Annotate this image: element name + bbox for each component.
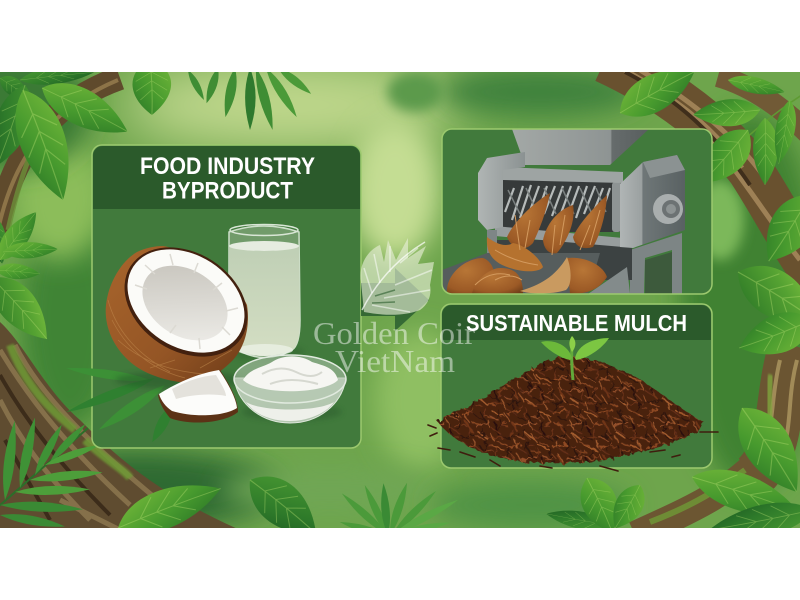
- foliage: top right leaves: [620, 72, 800, 185]
- icon: palm blades under coconut: [65, 364, 177, 445]
- arrow: process flow: [361, 268, 429, 331]
- foliage: bottom left palm: [0, 416, 103, 531]
- icon: curled coir husks: [487, 237, 543, 271]
- icon: coir tray: [442, 253, 600, 294]
- heading: food industry byproduct: BYPRODUCT: [162, 178, 293, 204]
- icon: mulch pile: [428, 357, 718, 471]
- foliage: left middle leaves: [0, 212, 58, 339]
- icon: machine crossbars: [503, 167, 623, 183]
- icon: right housing with shaft: [620, 155, 685, 248]
- watermark text: Golden Coir: [313, 315, 475, 351]
- icon: halved coconut: [104, 225, 268, 389]
- panel: shredder machine: [442, 129, 712, 294]
- icon: bowl of coconut cream: [234, 355, 346, 423]
- foliage: right side leaves: [692, 196, 800, 528]
- heading: food industry byproduct: FOOD INDUSTRY: [140, 153, 315, 180]
- icon: left frame: [478, 152, 525, 230]
- icon: machine legs: [630, 233, 682, 294]
- foliage: top palm fronds: [188, 72, 311, 130]
- panel: sustainable mulch: [428, 304, 718, 471]
- icon: hopper: [512, 129, 649, 165]
- icon: seedling: [541, 336, 609, 380]
- vines: tree trunks: [0, 60, 800, 535]
- panel header: food industry byproduct: [93, 146, 360, 209]
- icon: dark under-bar area: [490, 240, 632, 280]
- heading: sustainable mulch: SUSTAINABLE MULCH: [466, 310, 687, 336]
- icon: glass of coconut water: [225, 224, 305, 360]
- panel: food industry byproduct: [65, 145, 361, 448]
- icon: coconut piece: [158, 370, 238, 423]
- icon: coir husks: [447, 193, 607, 294]
- watermark text: VietNam: [335, 343, 455, 379]
- foliage: bottom leaves: [118, 476, 644, 528]
- panel header: sustainable mulch: [442, 305, 711, 340]
- watermark text: [313, 315, 475, 379]
- icon: shredder rotor: [503, 180, 621, 232]
- heading: food industry byproduct: [140, 153, 315, 204]
- logo: watermark palm leaf: [360, 238, 434, 315]
- foliage: top left leaves: [0, 72, 172, 200]
